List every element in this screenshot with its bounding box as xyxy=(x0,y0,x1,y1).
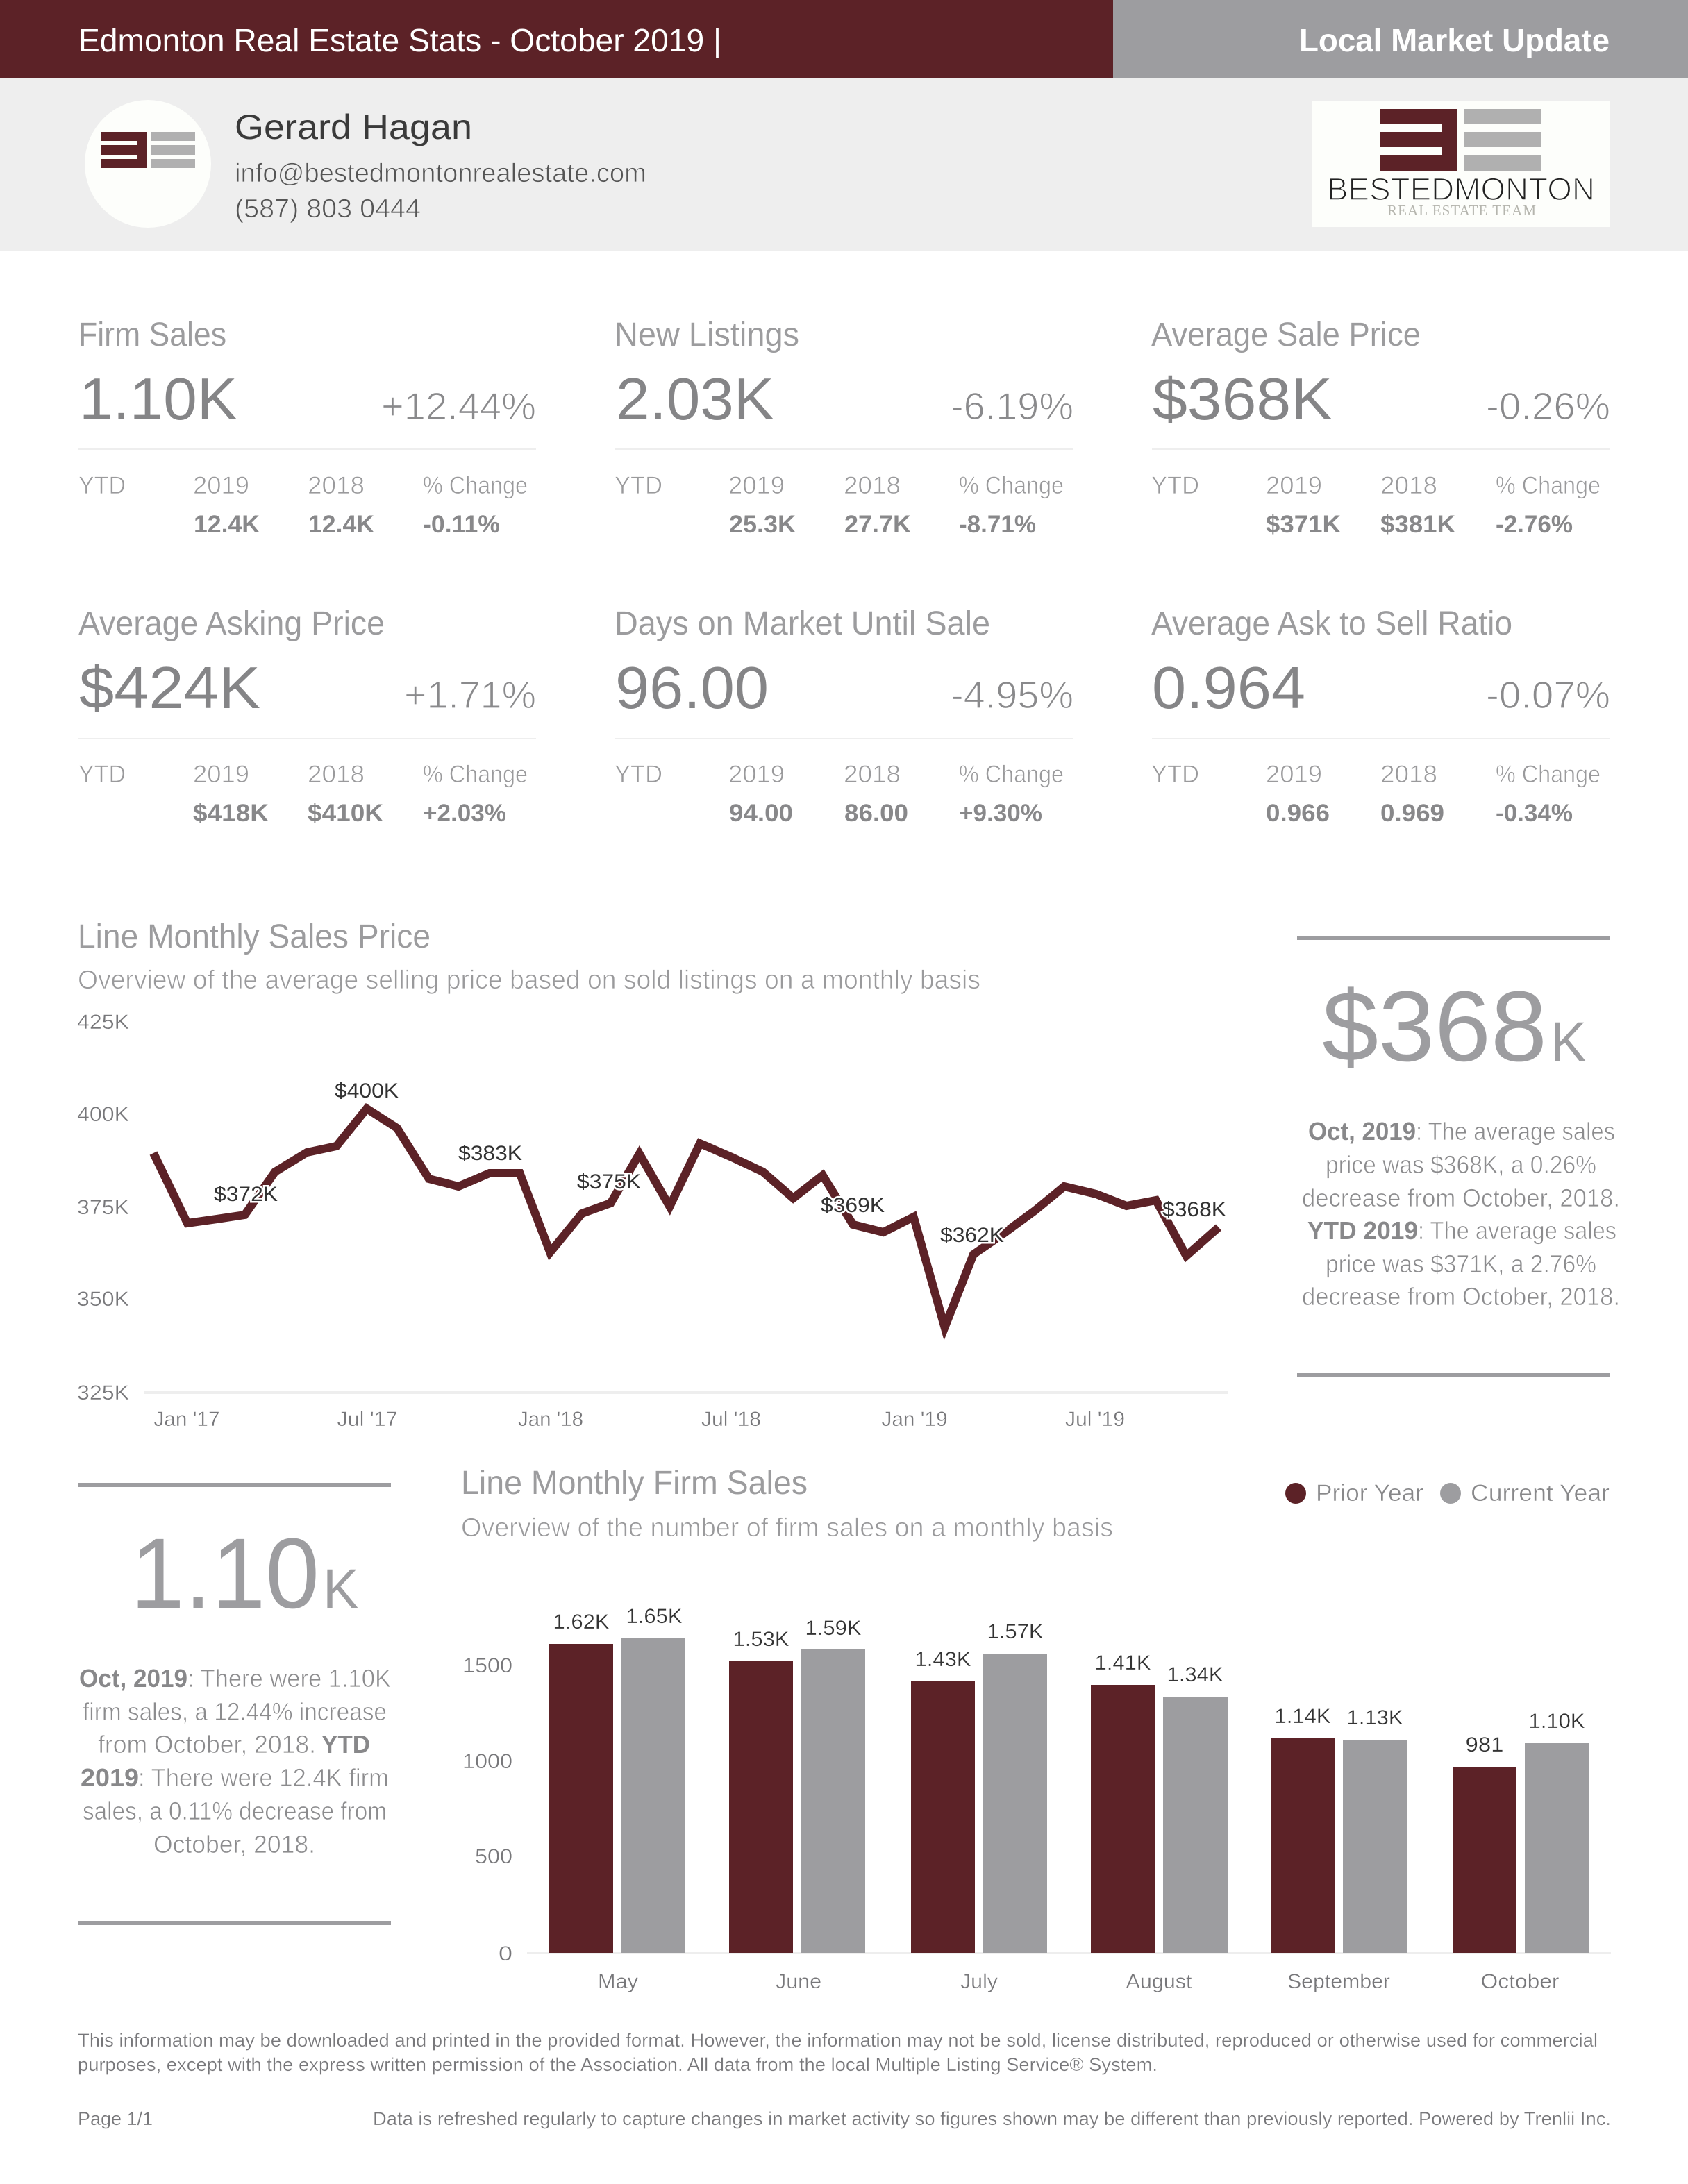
panel: average asking price: 2019 xyxy=(193,761,249,788)
panel: average sale price: -0.26% xyxy=(1486,385,1610,428)
panel: average asking price: $424K xyxy=(79,655,260,721)
footer data note: Data is refreshed regularly to capture changes in market activity so figures shown may be different than previously reported. Powered by Trenlii Inc. xyxy=(373,2108,1611,2129)
line chart: monthly sales price: 425K xyxy=(77,1011,129,1034)
bars: July: 1.57K xyxy=(987,1620,1043,1643)
panel: average ask to sell ratio: 2018 xyxy=(1380,761,1437,788)
callout: average sale price summary xyxy=(1297,936,1620,1377)
panel: firm sales: 2019 xyxy=(193,472,249,499)
line chart: monthly sales price: Jul '17 xyxy=(337,1408,397,1431)
callout: average sale price summary: : The average sales xyxy=(1416,1117,1615,1145)
panel: average ask to sell ratio: -0.34% xyxy=(1496,800,1573,827)
panel: new listings: % Change xyxy=(959,472,1064,499)
callout: firm sales summary: firm sales, a 12.44% increase xyxy=(83,1697,387,1726)
legend: Prior Year xyxy=(1316,1480,1423,1506)
callout: firm sales summary: YTD xyxy=(321,1730,370,1758)
bars: October: 981 xyxy=(1465,1733,1504,1756)
callout: average sale price summary: price was $371K, a 2.76% xyxy=(1326,1250,1596,1278)
bar chart: monthly firm sales: May xyxy=(598,1970,638,1993)
line chart: monthly sales price: $372K xyxy=(214,1183,278,1206)
panel: days on market until sale: -4.95% xyxy=(951,673,1073,716)
line chart: monthly sales price: $383K xyxy=(458,1142,522,1165)
bars: August: 1.41K xyxy=(1094,1652,1151,1674)
callout: average sale price summary: YTD 2019 xyxy=(1307,1216,1418,1245)
bar chart: monthly firm sales: 1500 xyxy=(462,1654,512,1677)
panel: average sale price xyxy=(1151,317,1610,538)
bars: May: 1.62K xyxy=(553,1611,610,1633)
agent band xyxy=(0,78,1688,251)
bars: September xyxy=(1271,1705,1407,1953)
panel: firm sales: % Change xyxy=(423,472,528,499)
bars: June: 1.59K xyxy=(805,1617,861,1640)
heading: line monthly sales price: Overview of the average selling price based on sold listings on a monthly basis xyxy=(78,966,980,995)
panel: average ask to sell ratio: 2019 xyxy=(1266,761,1322,788)
bar chart: monthly firm sales: July xyxy=(960,1970,998,1993)
title: Edmonton Real Estate Stats - October 2019 | xyxy=(78,22,721,58)
callout: average sale price summary: price was $368K, a 0.26% xyxy=(1326,1150,1596,1179)
icon: brokerage logo: BESTEDMONTON xyxy=(1327,171,1595,207)
callout: firm sales summary: : There were 1.10K xyxy=(187,1664,391,1692)
panel: average sale price: $371K xyxy=(1266,511,1341,538)
panel: average asking price: $418K xyxy=(193,800,269,827)
callout: firm sales summary: sales, a 0.11% decrease from xyxy=(83,1797,387,1825)
callout: average sale price summary: decrease from October, 2018. xyxy=(1302,1282,1620,1311)
panel: days on market until sale: 2019 xyxy=(728,761,785,788)
line chart: monthly sales price: Jan '19 xyxy=(882,1408,947,1431)
panel: new listings: 2018 xyxy=(844,472,901,499)
line chart: monthly sales price: $369K xyxy=(821,1194,885,1217)
panel: average ask to sell ratio: 0.966 xyxy=(1266,800,1330,827)
callout: firm sales summary: 2019 xyxy=(81,1763,139,1792)
footer disclaimer: purposes, except with the express written permission of the Association. All data from the local Multiple Listing Service® System. xyxy=(78,2054,1158,2075)
callout: firm sales summary xyxy=(78,1483,391,1925)
callout: firm sales summary: : There were 12.4K firm xyxy=(138,1763,389,1792)
panel: firm sales: 2018 xyxy=(308,472,365,499)
panel: days on market until sale xyxy=(615,605,1073,827)
icon: agent avatar logo xyxy=(85,100,211,228)
panel: average asking price: +1.71% xyxy=(404,673,536,716)
line chart: monthly sales price: $400K xyxy=(335,1080,399,1102)
bars: August: 1.34K xyxy=(1167,1663,1223,1686)
agent name: Gerard Hagan xyxy=(235,108,472,146)
line chart: monthly sales price: 375K xyxy=(77,1196,129,1219)
footer disclaimer xyxy=(78,2030,1598,2075)
heading: line monthly sales price xyxy=(78,918,980,995)
bars: July xyxy=(911,1620,1047,1953)
panel: average asking price: Average Asking Price xyxy=(78,605,385,642)
bars: October: 1.10K xyxy=(1529,1710,1585,1733)
heading: line monthly firm sales: Overview of the number of firm sales on a monthly basis xyxy=(461,1513,1113,1543)
panel: average sale price: $368K xyxy=(1153,367,1332,432)
line chart: monthly sales price: $362K xyxy=(940,1224,1004,1247)
line chart: monthly sales price: Jan '18 xyxy=(518,1408,583,1431)
bars: October xyxy=(1453,1710,1589,1953)
bars: May xyxy=(549,1605,685,1953)
line chart: monthly sales price xyxy=(77,1011,1228,1431)
panel: days on market until sale: 96.00 xyxy=(615,655,769,721)
icon: brokerage logo: REAL ESTATE TEAM xyxy=(1387,202,1536,219)
panel: firm sales xyxy=(78,317,536,538)
panel: average ask to sell ratio xyxy=(1151,605,1610,827)
panel: average sale price: 2019 xyxy=(1266,472,1322,499)
panel: average asking price: 2018 xyxy=(308,761,365,788)
panel: new listings: 25.3K xyxy=(729,511,796,538)
bar chart: monthly firm sales: August xyxy=(1126,1970,1192,1993)
bars: July: 1.43K xyxy=(915,1648,971,1671)
panel: new listings: YTD xyxy=(615,472,662,499)
bar chart: monthly firm sales: October xyxy=(1480,1970,1560,1993)
panel: firm sales: 12.4K xyxy=(194,511,260,538)
callout: firm sales summary: October, 2018. xyxy=(153,1830,315,1858)
callout: average sale price summary: $368 xyxy=(1322,971,1547,1082)
panel: new listings: 27.7K xyxy=(844,511,911,538)
bars: May: 1.65K xyxy=(626,1605,682,1628)
bar chart: monthly firm sales: June xyxy=(776,1970,821,1993)
bars: June: 1.53K xyxy=(733,1628,789,1651)
panel: average ask to sell ratio: % Change xyxy=(1496,761,1601,788)
callout: average sale price summary: : The average sales xyxy=(1418,1216,1616,1245)
bar chart: monthly firm sales: 0 xyxy=(499,1942,512,1965)
bar chart: monthly firm sales: 500 xyxy=(475,1845,512,1868)
panel: firm sales: -0.11% xyxy=(423,511,500,538)
panel: average asking price xyxy=(78,605,536,827)
line chart: monthly sales price: $368K xyxy=(1162,1198,1226,1221)
line chart: monthly sales price: 350K xyxy=(77,1288,129,1311)
footer disclaimer: This information may be downloaded and printed in the provided format. However, the information may not be sold, license distributed, reproduced or otherwise used for commercial xyxy=(78,2030,1598,2051)
panel: days on market until sale: 86.00 xyxy=(844,800,908,827)
heading: line monthly sales price: Line Monthly Sales Price xyxy=(78,918,431,955)
line chart: monthly sales price: $375K xyxy=(577,1170,641,1193)
callout: firm sales summary: from October, 2018. xyxy=(98,1730,316,1758)
panel: average ask to sell ratio: Average Ask to Sell Ratio xyxy=(1151,605,1512,642)
panel: average sale price: $381K xyxy=(1380,511,1455,538)
line chart: monthly sales price: 400K xyxy=(77,1103,129,1126)
bars: June xyxy=(729,1617,865,1953)
header label: local market update: Local Market Update xyxy=(1299,22,1610,58)
bar chart: monthly firm sales xyxy=(462,1605,1611,1993)
agent email: info@bestedmontonrealestate.com xyxy=(235,159,646,188)
panel: days on market until sale: 94.00 xyxy=(729,800,793,827)
panel: firm sales: 1.10K xyxy=(79,367,237,432)
panel: days on market until sale: Days on Market Until Sale xyxy=(615,605,990,642)
panel: average asking price: $410K xyxy=(308,800,383,827)
legend: Current Year xyxy=(1471,1480,1610,1506)
panel: average sale price: 2018 xyxy=(1380,472,1437,499)
panel: firm sales: 12.4K xyxy=(308,511,374,538)
panel: new listings: 2019 xyxy=(728,472,785,499)
footer page number: Page 1/1 xyxy=(78,2108,153,2129)
callout: average sale price summary: Oct, 2019 xyxy=(1308,1117,1416,1145)
callout: firm sales summary: 1.10 xyxy=(131,1518,319,1629)
panel: average asking price: YTD xyxy=(78,761,126,788)
panel: firm sales: YTD xyxy=(78,472,126,499)
bar chart: monthly firm sales: 1000 xyxy=(462,1750,512,1773)
panel: average ask to sell ratio: -0.07% xyxy=(1486,673,1610,716)
panel: new listings: 2.03K xyxy=(616,367,774,432)
panel: firm sales: +12.44% xyxy=(381,385,536,428)
panel: average sale price: % Change xyxy=(1496,472,1601,499)
line chart: monthly sales price: Jan '17 xyxy=(154,1408,219,1431)
callout: firm sales summary: Oct, 2019 xyxy=(79,1664,187,1692)
panel: average ask to sell ratio: 0.969 xyxy=(1380,800,1444,827)
agent phone: (587) 803 0444 xyxy=(235,194,421,224)
panel: average sale price: -2.76% xyxy=(1496,511,1573,538)
panel: new listings xyxy=(615,317,1073,538)
panel: new listings: -8.71% xyxy=(959,511,1036,538)
panel: firm sales: Firm Sales xyxy=(78,317,226,353)
panel: average sale price: YTD xyxy=(1151,472,1199,499)
line chart: monthly sales price: Jul '19 xyxy=(1065,1408,1125,1431)
panel: average ask to sell ratio: YTD xyxy=(1151,761,1199,788)
bars: September: 1.14K xyxy=(1275,1705,1330,1728)
bars: September: 1.13K xyxy=(1347,1706,1403,1729)
panel: days on market until sale: +9.30% xyxy=(959,800,1042,827)
callout: firm sales summary: K xyxy=(323,1558,359,1621)
legend xyxy=(1285,1480,1610,1506)
icon: brokerage logo xyxy=(1312,101,1610,227)
heading: line monthly firm sales: Line Monthly Firm Sales xyxy=(461,1465,808,1502)
heading: line monthly firm sales xyxy=(461,1465,1113,1543)
line chart: monthly sales price: 325K xyxy=(77,1381,129,1404)
callout: average sale price summary: decrease from October, 2018. xyxy=(1302,1184,1620,1212)
panel: new listings: -6.19% xyxy=(951,385,1073,428)
panel: days on market until sale: % Change xyxy=(959,761,1064,788)
panel: days on market until sale: 2018 xyxy=(844,761,901,788)
bar chart: monthly firm sales: September xyxy=(1287,1970,1390,1993)
bars: August xyxy=(1091,1652,1228,1953)
header bar xyxy=(0,0,1688,78)
panel: average sale price: Average Sale Price xyxy=(1151,317,1421,353)
panel: average asking price: % Change xyxy=(423,761,528,788)
panel: average ask to sell ratio: 0.964 xyxy=(1152,655,1305,721)
callout: average sale price summary: K xyxy=(1551,1011,1587,1074)
panel: days on market until sale: YTD xyxy=(615,761,662,788)
panel: new listings: New Listings xyxy=(615,317,799,353)
line chart: monthly sales price: Jul '18 xyxy=(701,1408,761,1431)
panel: average asking price: +2.03% xyxy=(423,800,506,827)
